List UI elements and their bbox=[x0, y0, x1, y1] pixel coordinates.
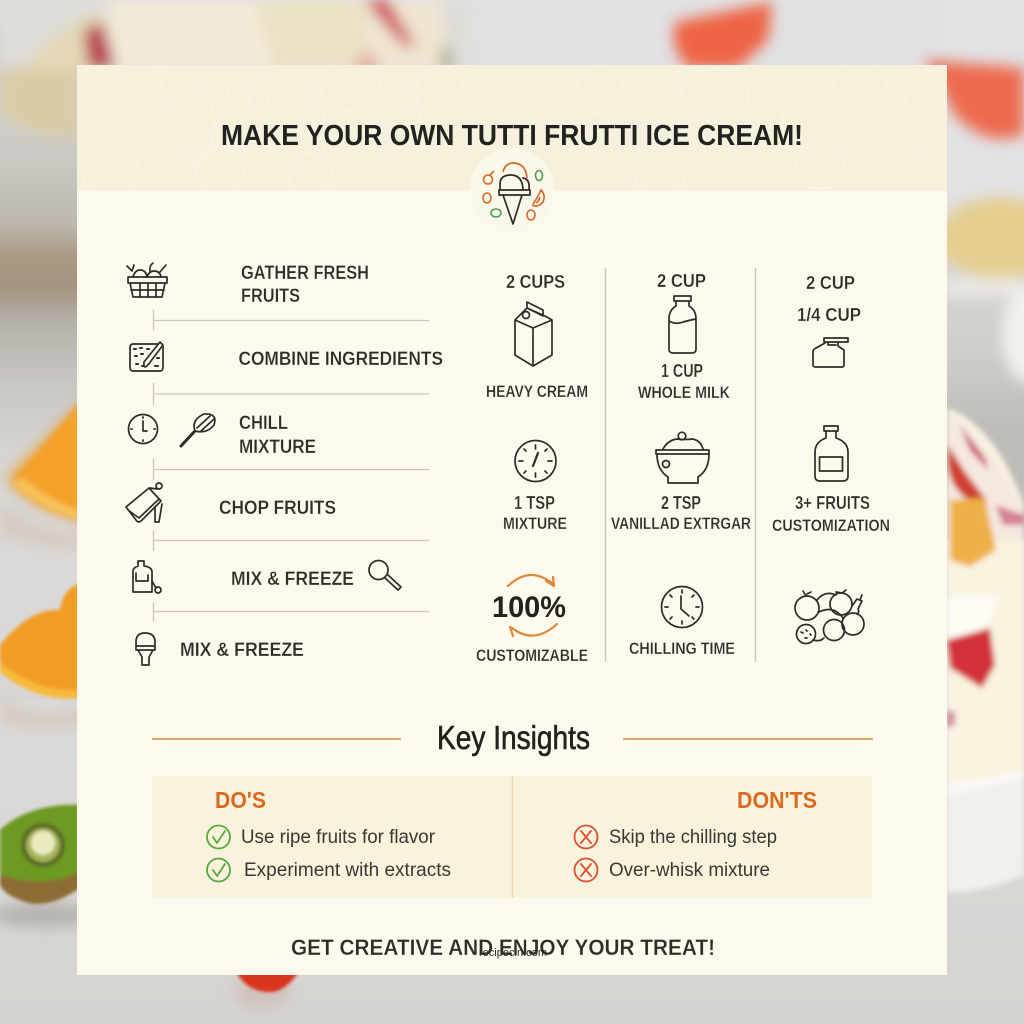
heading: key insights: Key Insights bbox=[437, 719, 590, 756]
strawberry top right bbox=[925, 60, 1024, 139]
orange left 1 bbox=[8, 398, 90, 522]
don'ts: DON'TS bbox=[737, 787, 817, 813]
cell: fruits customization bbox=[772, 426, 890, 535]
icon: cross bbox=[574, 858, 598, 882]
ice cream scoops in bowl bbox=[20, 10, 120, 70]
cell: vanilla: VANILLAD EXTRGAR bbox=[611, 515, 751, 533]
do's: Experiment with extracts bbox=[244, 859, 451, 881]
title: MAKE YOUR OWN TUTTI FRUTTI ICE CREAM! bbox=[221, 120, 803, 152]
cell: one tsp mixture: 1 TSP bbox=[514, 493, 555, 513]
step: gather fresh fruits: FRUITS bbox=[241, 286, 300, 307]
cell: 100 percent customizable bbox=[476, 575, 588, 665]
do's bbox=[207, 787, 451, 882]
orange slice 2 bbox=[0, 583, 80, 698]
strawberry shadow bbox=[234, 974, 290, 1010]
don'ts bbox=[574, 787, 817, 882]
main panel bbox=[77, 48, 947, 975]
step: mix and freeze with magnifier bbox=[133, 560, 401, 593]
don'ts: Over-whisk mixture bbox=[609, 859, 770, 881]
cell: heavy cream bbox=[486, 272, 588, 401]
cell: whole milk: WHOLE MILK bbox=[638, 384, 730, 402]
cell: chilling time: CHILLING TIME bbox=[629, 640, 735, 658]
step: chill mixture bbox=[128, 413, 316, 458]
cell: one tsp mixture: MIXTURE bbox=[503, 515, 567, 533]
footer message: GET CREATIVE AND ENJOY YOUR TREAT! bbox=[291, 935, 715, 960]
cell: vanilla bbox=[611, 432, 751, 533]
cell: fruits customization: CUSTOMIZATION bbox=[772, 517, 890, 535]
step: gather fresh fruits: GATHER FRESH bbox=[241, 263, 369, 284]
cell: 100 percent customizable: CUSTOMIZABLE bbox=[476, 647, 588, 665]
step: mix and freeze with cone bbox=[136, 633, 304, 665]
connector lines bbox=[153, 310, 429, 622]
step: chop fruits bbox=[126, 483, 336, 522]
watermark: recipecin.com bbox=[479, 947, 547, 959]
cell: vanilla: 2 TSP bbox=[661, 493, 701, 513]
cell: quarter cup: 1/4 CUP bbox=[797, 305, 861, 325]
cell: fruit pile bbox=[795, 590, 864, 644]
bowl rim top bbox=[0, 0, 472, 66]
step: chill mixture: MIXTURE bbox=[239, 437, 316, 458]
icon: check bbox=[207, 858, 230, 882]
orange slice 1 bbox=[12, 402, 80, 520]
panel: do's and don'ts bbox=[152, 776, 872, 898]
do's: DO'S bbox=[215, 787, 266, 813]
cell: quarter cup: 2 CUP bbox=[806, 273, 855, 293]
cell: 100 percent customizable: 100% bbox=[492, 591, 566, 624]
cell: chilling time bbox=[629, 586, 735, 658]
orange shadows bbox=[0, 695, 85, 729]
icon: check bbox=[207, 826, 230, 848]
ice cream scoop right bbox=[947, 408, 1024, 892]
don'ts: Skip the chilling step bbox=[609, 826, 777, 848]
kiwi shadow bbox=[0, 903, 100, 927]
cell: heavy cream: HEAVY CREAM bbox=[486, 383, 588, 401]
icon: cross bbox=[574, 826, 598, 848]
cell: whole milk: 2 CUP bbox=[657, 271, 706, 291]
right bowl with yellow filling bbox=[938, 198, 1024, 278]
strawberry bottom bbox=[235, 970, 300, 992]
steps column bbox=[126, 263, 443, 665]
step: gather fresh fruits bbox=[127, 263, 369, 307]
step: chop fruits: CHOP FRUITS bbox=[219, 498, 336, 519]
do's: Use ripe fruits for flavor bbox=[241, 826, 435, 848]
step: chill mixture: CHILL bbox=[239, 413, 288, 434]
cell: whole milk bbox=[638, 271, 730, 402]
strawberry top bbox=[674, 2, 772, 68]
step: combine ingredients bbox=[130, 342, 443, 371]
cell: one tsp mixture bbox=[503, 440, 567, 533]
step: mix and freeze with cone: MIX & FREEZE bbox=[180, 640, 304, 661]
step: mix and freeze with magnifier: MIX & FREEZE bbox=[231, 569, 354, 590]
cell: heavy cream: 2 CUPS bbox=[506, 272, 565, 292]
header band bbox=[77, 65, 947, 191]
ingredients grid bbox=[476, 268, 890, 665]
cell: quarter cup bbox=[797, 273, 861, 367]
icon: ice cream cone emblem bbox=[470, 148, 554, 232]
cell: fruits customization: 3+ FRUITS bbox=[795, 493, 870, 513]
kiwi bbox=[0, 805, 80, 904]
step: combine ingredients: COMBINE INGREDIENTS bbox=[238, 349, 443, 370]
white bowl bbox=[947, 772, 1024, 892]
cell: whole milk: 1 CUP bbox=[661, 361, 703, 381]
